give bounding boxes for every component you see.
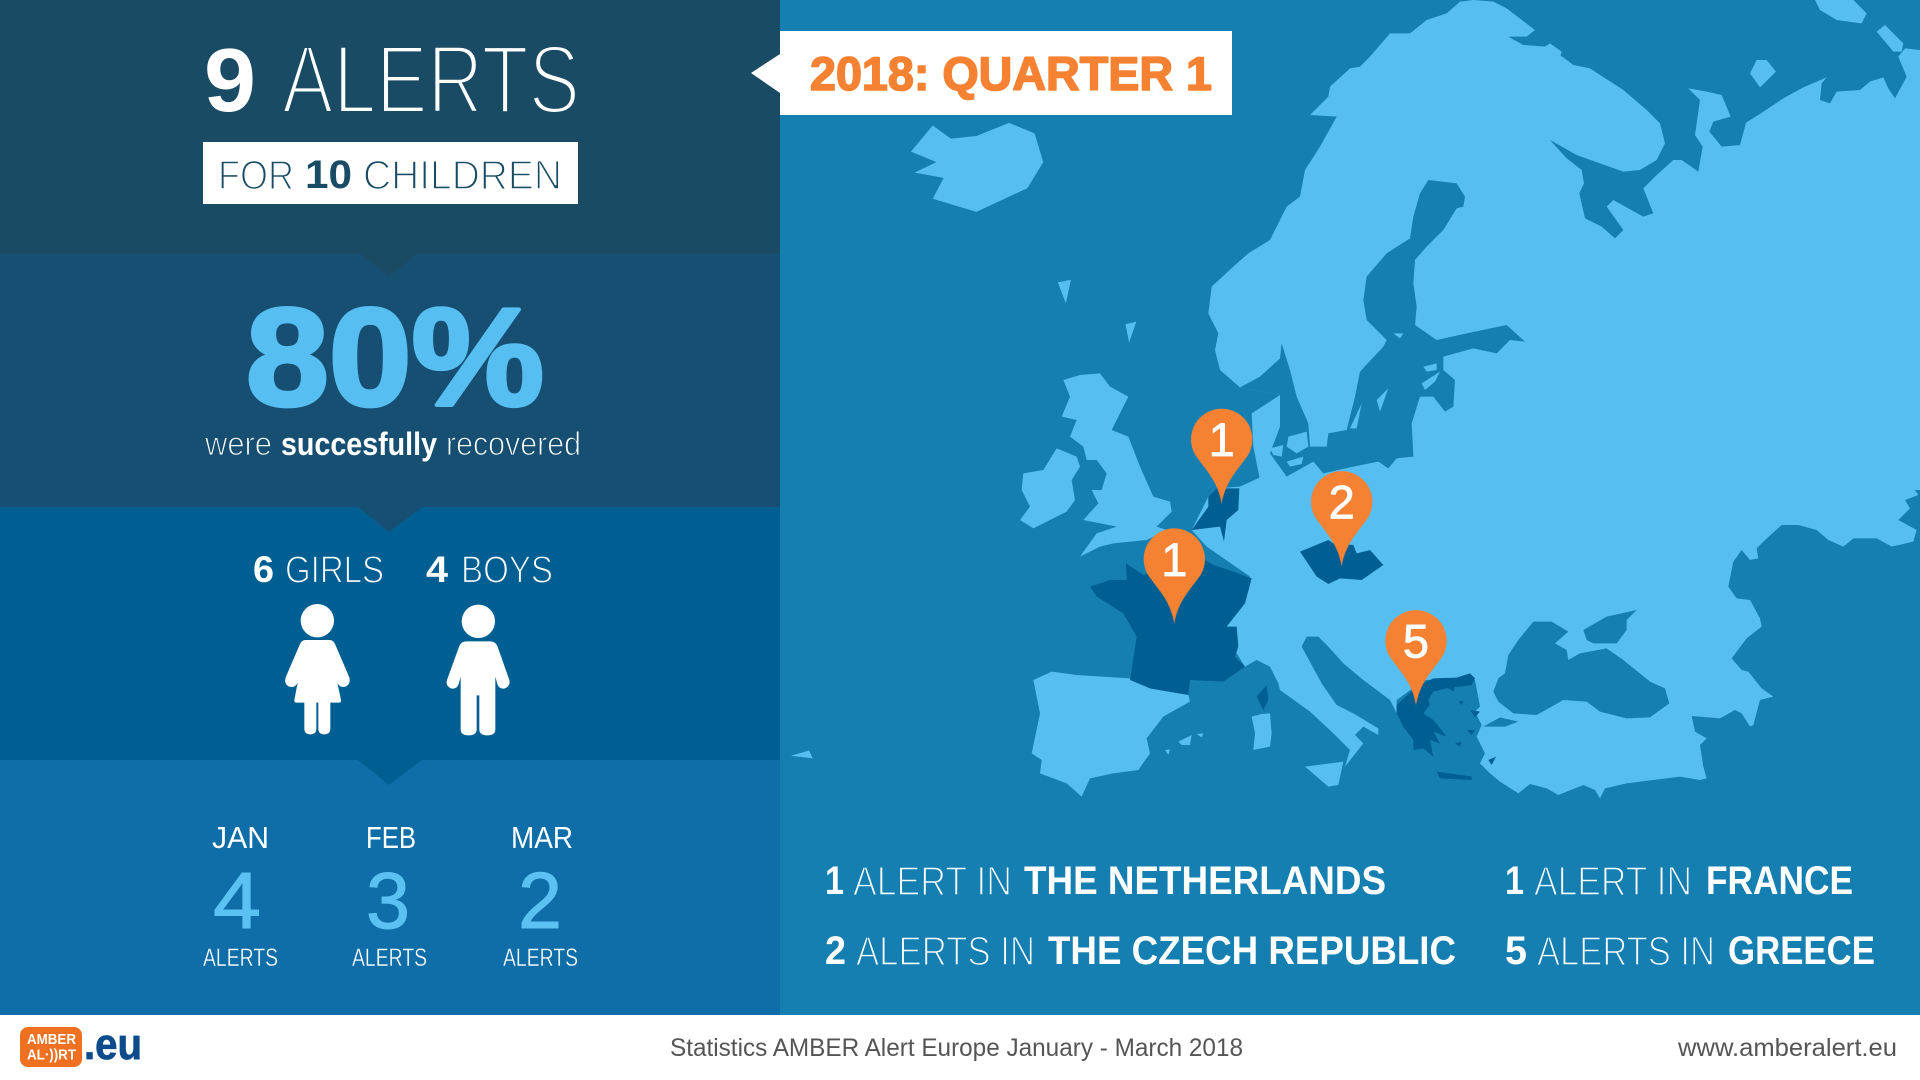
map pin: Netherlands 1	[1191, 409, 1252, 504]
land: Spain and Portugal	[1032, 672, 1190, 797]
caption: were succesfully recovered: recovered	[446, 425, 581, 462]
land: Great Britain	[1062, 373, 1172, 557]
column: February: FEB	[366, 820, 416, 855]
label: for 10 children: CHILDREN	[363, 152, 562, 198]
panel: recovery rate	[0, 253, 780, 507]
label: 6 girls: GIRLS	[285, 550, 384, 592]
column: February: 3	[366, 856, 410, 945]
row: Greece: 5	[1505, 929, 1527, 973]
chevron	[360, 253, 418, 277]
label: for 10 children	[203, 142, 578, 204]
column: January: JAN	[212, 820, 269, 855]
panel: map of Europe	[780, 0, 1920, 1015]
chevron	[358, 760, 422, 785]
title flag: 2018 quarter 1: 2018: QUARTER 1	[810, 47, 1212, 100]
row: Czech Republic: ALERTS IN	[856, 928, 1035, 974]
footer source text: Statistics AMBER Alert Europe January - March 2018	[670, 1034, 1243, 1062]
map pin: France 1	[1144, 528, 1205, 624]
map pin: Greece 5: 5	[1403, 614, 1429, 668]
panel: girls and boys	[0, 507, 780, 760]
row: France: ALERT IN	[1534, 858, 1692, 904]
footer url: www.amberalert.eu	[1677, 1034, 1897, 1062]
icon: girl	[285, 604, 350, 734]
land: Iceland and small northern islands	[791, 123, 1136, 758]
heading: 9 alerts	[204, 25, 580, 134]
column: January	[203, 820, 278, 972]
land: Sardinia	[1252, 713, 1272, 750]
map pin: France 1: 1	[1161, 533, 1187, 586]
highlighted country: France	[1090, 557, 1268, 710]
chevron	[358, 507, 422, 532]
highlighted country: Czech Republic	[1300, 540, 1383, 584]
row: France: 1	[1505, 859, 1524, 903]
land: Ireland	[1020, 448, 1080, 528]
highlighted country: Netherlands	[1192, 488, 1239, 542]
column: January: ALERTS	[203, 944, 278, 972]
land: north-east coast and Arctic islands	[1545, 0, 1920, 260]
row: Greece	[1505, 928, 1875, 974]
row: Czech Republic: 2	[825, 929, 846, 973]
label: 6 girls: 6	[253, 549, 274, 590]
label: 4 boys	[426, 549, 553, 592]
panel: alerts total	[0, 0, 780, 254]
row: Netherlands: THE NETHERLANDS	[1024, 859, 1386, 903]
row: France: FRANCE	[1706, 859, 1853, 903]
highlighted country: Greece	[1397, 673, 1496, 780]
land: south-east Europe and Turkey with Black Sea	[1420, 480, 1920, 798]
row: France	[1505, 858, 1853, 904]
logo: AMBER Alert .eu: AMBER	[27, 1031, 76, 1048]
label: 4 boys: BOYS	[461, 550, 553, 592]
caption: were succesfully recovered: succesfully	[281, 426, 437, 462]
label: for 10 children: 10	[305, 153, 352, 197]
map pin: Czech Republic 2: 2	[1329, 476, 1355, 528]
row: Netherlands	[825, 858, 1386, 904]
column: February	[352, 820, 427, 972]
column: February: ALERTS	[352, 944, 427, 972]
label: 6 girls	[253, 549, 384, 592]
heading: 9 alerts: ALERTS	[282, 25, 580, 134]
heading: 9 alerts: 9	[204, 31, 256, 131]
map pin: Greece 5	[1385, 610, 1447, 705]
map pin: Czech Republic 2	[1311, 471, 1372, 566]
row: Czech Republic	[825, 928, 1456, 974]
map pin: Netherlands 1: 1	[1209, 413, 1235, 466]
alert list: per country	[825, 858, 1875, 974]
stat: 80%: 80%	[246, 280, 544, 435]
icon: boy	[447, 605, 510, 735]
column: March	[503, 820, 578, 972]
column: March: MAR	[511, 820, 573, 855]
column: March: 2	[518, 856, 562, 945]
logo: AMBER Alert .eu	[20, 1020, 142, 1069]
title flag: 2018 quarter 1	[751, 31, 1232, 115]
row: Netherlands: 1	[825, 859, 844, 903]
label: 4 boys: 4	[426, 549, 448, 590]
land: Balearic islands	[1165, 733, 1203, 755]
panel: alerts per month	[0, 760, 780, 1015]
row: Greece: GREECE	[1728, 929, 1875, 973]
land: Sicily	[1305, 762, 1343, 787]
label: for 10 children: FOR	[218, 152, 294, 198]
logo: AMBER Alert .eu: AL·))RT	[27, 1046, 76, 1064]
row: Czech Republic: THE CZECH REPUBLIC	[1048, 929, 1456, 973]
logo: AMBER Alert .eu: .eu	[84, 1020, 142, 1069]
column: January: 4	[213, 856, 261, 945]
caption: were succesfully recovered	[204, 425, 581, 462]
land: western and central Europe	[1020, 373, 1467, 797]
row: Netherlands: ALERT IN	[853, 858, 1012, 904]
caption: were succesfully recovered: were	[204, 425, 272, 462]
row: Greece: ALERTS IN	[1537, 928, 1715, 974]
column: March: ALERTS	[503, 944, 578, 972]
footer	[0, 1015, 1920, 1080]
land: Scandinavia and north-east Europe	[1208, 0, 1700, 500]
land: Russia interior	[1680, 250, 1920, 490]
